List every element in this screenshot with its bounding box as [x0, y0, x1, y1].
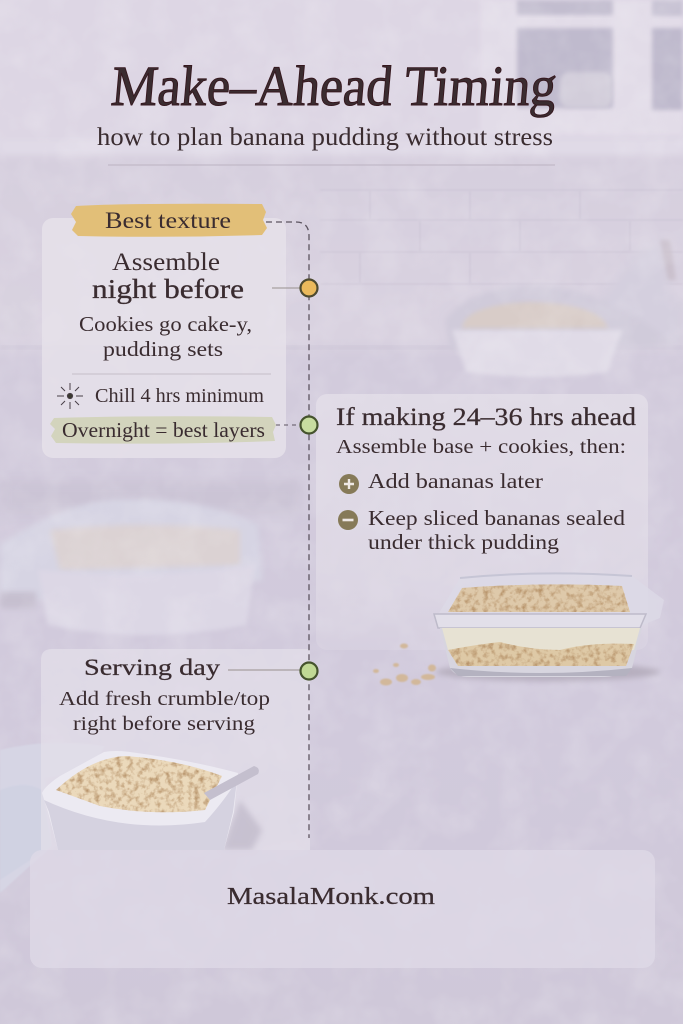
text: cookies go cake-y: pudding sets	[103, 337, 223, 361]
panel: night before card	[42, 204, 286, 458]
node: serving day	[300, 662, 318, 680]
timeline	[228, 222, 318, 838]
label: overnight best layers: Overnight = best layers	[62, 418, 265, 442]
text: keep sliced bananas sealed: under thick pudding	[368, 530, 559, 554]
heading: serving day: Serving day	[84, 655, 220, 681]
heading: assemble night before: night before	[92, 274, 244, 304]
node: 24-36 hours	[300, 416, 318, 434]
text: keep sliced bananas sealed: Keep sliced bananas sealed	[368, 506, 625, 530]
text: add fresh crumble	[59, 688, 270, 735]
title: Make–Ahead Timing	[109, 55, 559, 118]
node: night before	[300, 280, 318, 296]
panel: footer	[30, 850, 655, 968]
icon: chill sparkle	[57, 383, 83, 409]
icon: plus	[339, 474, 359, 494]
heading: if making 24-36 hrs ahead: If making 24–36 hrs ahead	[336, 404, 637, 431]
text: add fresh crumble: Add fresh crumble/top	[59, 688, 270, 710]
panel: 24-36 hours card	[316, 394, 648, 650]
text: add bananas later: Add bananas later	[368, 469, 543, 493]
label: best texture: Best texture	[105, 208, 231, 233]
text: keep sliced bananas sealed	[368, 506, 625, 554]
heading: assemble night before	[92, 249, 244, 304]
spoon handle	[204, 766, 259, 800]
text: chill 4 hrs minimum: Chill 4 hrs minimum	[95, 385, 264, 407]
text: assemble base + cookies: Assemble base + cookies, then:	[336, 436, 626, 458]
subtitle: how to plan banana pudding without stress	[97, 124, 553, 151]
bowl of crumble	[42, 750, 262, 850]
website: MasalaMonk.com	[227, 884, 435, 910]
crumbs on counter	[373, 644, 436, 686]
text: cookies go cake-y: Cookies go cake-y,	[79, 312, 252, 336]
glass dish with pudding	[373, 573, 664, 686]
heading: assemble night before: Assemble	[112, 249, 220, 276]
panel: tea towel	[0, 743, 105, 893]
text: add fresh crumble: right before serving	[73, 713, 255, 735]
panel: serving day card	[41, 649, 310, 850]
label: best texture	[71, 204, 267, 237]
text: cookies go cake-y	[79, 312, 252, 361]
icon: minus	[338, 510, 358, 530]
